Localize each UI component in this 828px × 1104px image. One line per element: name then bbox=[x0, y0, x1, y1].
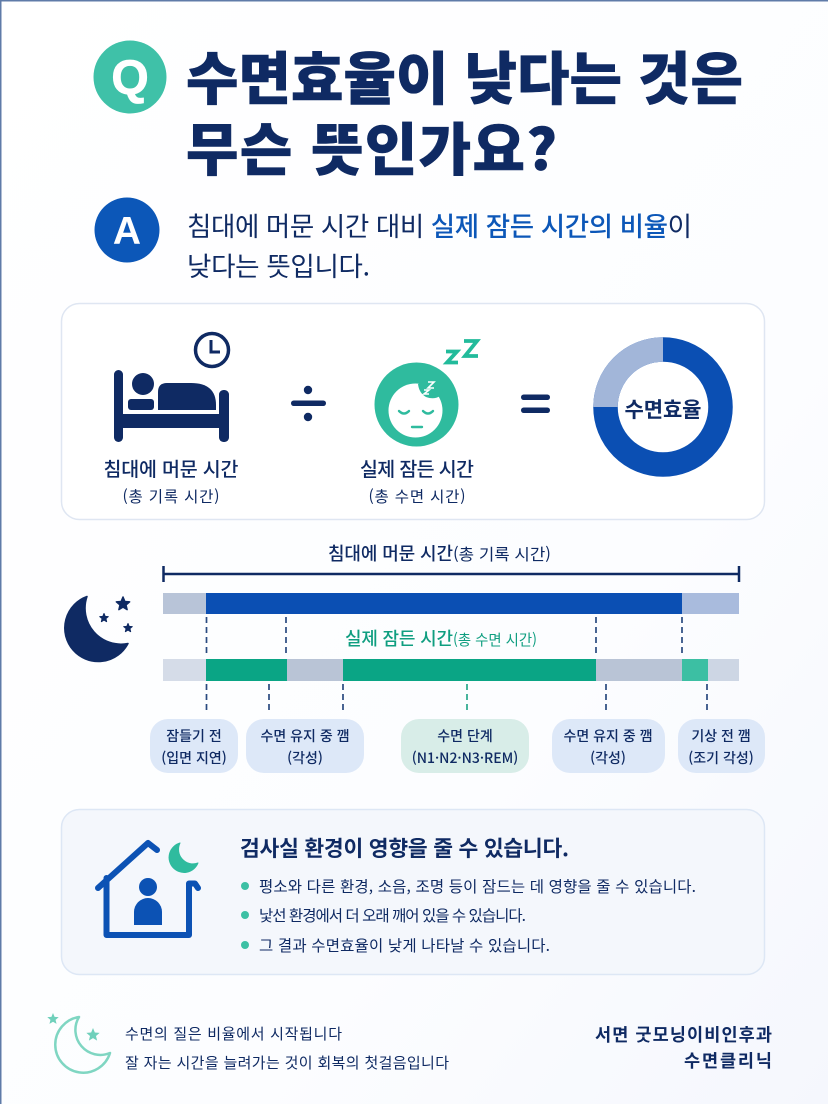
icon: A badge: A bbox=[113, 210, 141, 253]
pill: before sleep bbox=[150, 719, 238, 773]
pill: early awakening bbox=[678, 719, 765, 773]
panel: formula bbox=[62, 304, 764, 520]
icon: divide bbox=[291, 386, 326, 421]
icon: moon and stars bbox=[65, 596, 132, 662]
chart: sleep efficiency donut bbox=[606, 350, 720, 464]
answer text bbox=[187, 205, 692, 284]
pill: awake during sleep 2: 수면 유지 중 깸 bbox=[563, 726, 653, 746]
footer message bbox=[125, 1023, 449, 1073]
bracket bbox=[164, 566, 739, 582]
bullet list: 평소와 다른 환경, 소음, 조명 등이 잠드는 데 영향을 줄 수 있습니다. bbox=[259, 875, 696, 897]
pill: awake during sleep bbox=[246, 719, 364, 773]
clinic name bbox=[595, 1022, 772, 1073]
bullet list: 그 결과 수면효율이 낮게 나타날 수 있습니다. bbox=[259, 934, 550, 956]
pill: sleep stages: (N1·N2·N3·REM) bbox=[412, 748, 518, 768]
panel: lab environment bbox=[62, 810, 764, 974]
pill: awake during sleep: 수면 유지 중 깸 bbox=[260, 726, 350, 746]
bar: time in bed bbox=[163, 593, 739, 614]
pill: early awakening: (조기 각성) bbox=[688, 748, 754, 768]
title bbox=[186, 34, 743, 187]
label: time in bed: (총 기록 시간) bbox=[122, 485, 220, 507]
heading: actual sleep time: (총 수면 시간) bbox=[453, 629, 537, 650]
answer text: 낮다는 뜻입니다. bbox=[187, 245, 370, 284]
pill: sleep stages bbox=[401, 719, 529, 773]
footer message: 잘 자는 시간을 늘려가는 것이 회복의 첫걸음입니다 bbox=[125, 1052, 449, 1073]
timeline diagram bbox=[65, 540, 765, 773]
clinic name: 수면클리닉 bbox=[684, 1048, 772, 1073]
icon: house with person and moon bbox=[98, 843, 198, 935]
clinic name: 서면 굿모닝이비인후과 bbox=[595, 1022, 772, 1047]
heading: time in bed: 침대에 머문 시간 bbox=[328, 540, 453, 566]
bullet list bbox=[241, 875, 696, 956]
heading: 검사실 환경이 영향을 줄 수 있습니다. bbox=[240, 832, 569, 863]
pill: early awakening: 기상 전 깸 bbox=[691, 726, 751, 746]
pill: before sleep: 잠들기 전 bbox=[166, 726, 222, 746]
pill: awake during sleep 2 bbox=[552, 719, 665, 773]
label: time in bed: 침대에 머문 시간 bbox=[104, 453, 239, 482]
label: time in bed bbox=[104, 453, 239, 507]
pill: awake during sleep 2: (각성) bbox=[590, 748, 626, 768]
heading: actual sleep time bbox=[345, 625, 537, 651]
pill: sleep stages: 수면 단계 bbox=[437, 726, 493, 746]
label: actual sleep time: (총 수면 시간) bbox=[368, 485, 466, 507]
pill: awake during sleep: (각성) bbox=[287, 748, 323, 768]
icon: Q badge bbox=[94, 40, 166, 114]
heading: actual sleep time: 실제 잠든 시간 bbox=[345, 625, 453, 651]
title: 수면효율이 낮다는 것은 bbox=[186, 34, 743, 116]
icon: A badge bbox=[94, 198, 160, 262]
icon: outlined moon and stars bbox=[47, 1013, 110, 1073]
bullet list: 낯선 환경에서 더 오래 깨어 있을 수 있습니다. bbox=[259, 904, 526, 926]
icon: equals bbox=[521, 394, 550, 413]
icon: bed with clock bbox=[114, 334, 229, 442]
label: actual sleep time bbox=[360, 453, 474, 507]
heading: time in bed: (총 기록 시간) bbox=[453, 541, 551, 565]
title: 무슨 뜻인가요? bbox=[186, 105, 557, 187]
bar: actual sleep bbox=[163, 659, 739, 681]
icon: sleeping face bbox=[374, 341, 478, 446]
label: actual sleep time: 실제 잠든 시간 bbox=[360, 453, 474, 482]
icon: Q badge: Q bbox=[111, 52, 149, 105]
chart: sleep efficiency donut: 수면효율 bbox=[624, 394, 702, 424]
answer text: 침대에 머문 시간 대비 실제 잠든 시간의 비율이 bbox=[187, 205, 692, 244]
pill: before sleep: (입면 지연) bbox=[161, 748, 227, 768]
heading: time in bed bbox=[328, 540, 551, 566]
footer message: 수면의 질은 비율에서 시작됩니다 bbox=[125, 1023, 342, 1044]
